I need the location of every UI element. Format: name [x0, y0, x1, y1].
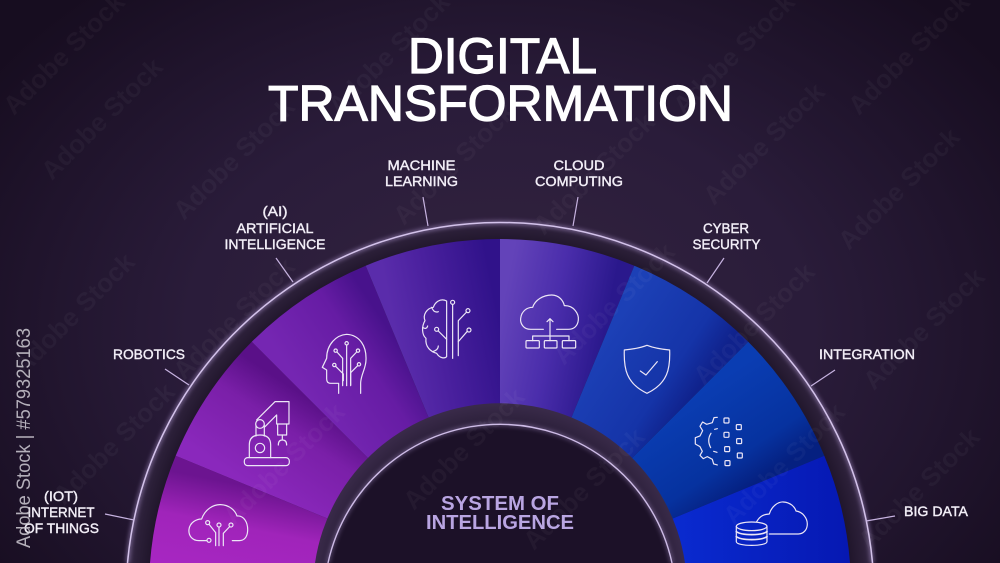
central hub [315, 403, 685, 563]
segment: Machine Learning [366, 239, 500, 451]
label: IoT: INTERNET [28, 505, 94, 520]
icon: IoT cloud [189, 505, 248, 546]
label: IoT: OF THINGS [24, 521, 99, 536]
segment: IoT [150, 456, 361, 563]
watermarks: Adobe Stock [717, 396, 851, 530]
watermarks: Adobe Stock [697, 76, 831, 210]
icon: robot arm [244, 402, 289, 466]
label: Integration [811, 347, 915, 386]
label: Machine Learning [385, 158, 458, 226]
icon: brain [423, 300, 471, 358]
label: Integration: INTEGRATION [819, 347, 915, 362]
watermarks: Adobe Stock [397, 381, 531, 515]
segment: Big Data [639, 456, 850, 563]
watermarks: Adobe Stock [47, 376, 181, 510]
watermarks: Adobe Stock [387, 96, 521, 230]
segment: Robotics [176, 342, 394, 533]
watermarks: Adobe Stock [167, 251, 301, 385]
label: Cloud Computing [535, 158, 623, 226]
watermarks: Adobe Stock [7, 246, 141, 380]
label: Cyber Security: CYBER [703, 221, 749, 236]
label: IoT [24, 489, 134, 536]
label: IoT: (IOT) [44, 489, 78, 504]
watermarks: Adobe Stock [517, 421, 651, 555]
segment: AI [252, 266, 443, 484]
title [268, 28, 733, 132]
title: TRANSFORMATION [268, 76, 733, 132]
label: Big Data [866, 504, 968, 521]
watermarks: Adobe Stock [527, 106, 661, 240]
watermarks: Adobe Stock [547, 236, 681, 370]
icon: gear with data [695, 417, 742, 466]
label: Machine Learning: MACHINE [388, 158, 456, 173]
title: DIGITAL [408, 28, 597, 84]
watermarks: Adobe Stock [852, 421, 986, 555]
icon: AI head [322, 334, 366, 393]
icon: big data cloud [736, 502, 807, 545]
outer ring band [126, 222, 874, 563]
watermarks: Adobe Stock [687, 256, 821, 390]
watermarks: Adobe Stock [832, 121, 966, 255]
icon: shield [624, 345, 670, 393]
label: AI: INTELLIGENCE [224, 237, 326, 252]
label: Robotics [113, 347, 189, 385]
label: Cyber Security: SECURITY [692, 237, 760, 252]
label: AI: (AI) [262, 204, 288, 219]
watermarks: Adobe Stock [167, 91, 301, 225]
center label: SYSTEM OF [441, 493, 559, 515]
label: AI [224, 204, 326, 282]
label: Big Data: BIG DATA [904, 504, 968, 519]
label: Cloud Computing: COMPUTING [535, 174, 623, 189]
label: AI: ARTIFICIAL [236, 221, 314, 236]
wheel segments [150, 239, 850, 563]
icon: cloud computing [521, 295, 578, 348]
label: Cyber Security [692, 221, 760, 283]
watermarks: Adobe Stock [35, 51, 169, 185]
watermarks: Adobe Stock [857, 261, 991, 395]
center label: INTELLIGENCE [426, 512, 574, 534]
center label [426, 493, 574, 534]
label: Robotics: ROBOTICS [113, 347, 185, 362]
segment: Cyber Security [557, 266, 748, 484]
watermarks: Adobe Stock [217, 396, 351, 530]
label: Cloud Computing: CLOUD [554, 158, 605, 173]
segment: Cloud Computing [500, 239, 634, 451]
segment: Integration [606, 342, 824, 533]
label: Machine Learning: LEARNING [385, 174, 458, 189]
stock ID vertical text: Adobe Stock | #579325163 [14, 328, 35, 548]
